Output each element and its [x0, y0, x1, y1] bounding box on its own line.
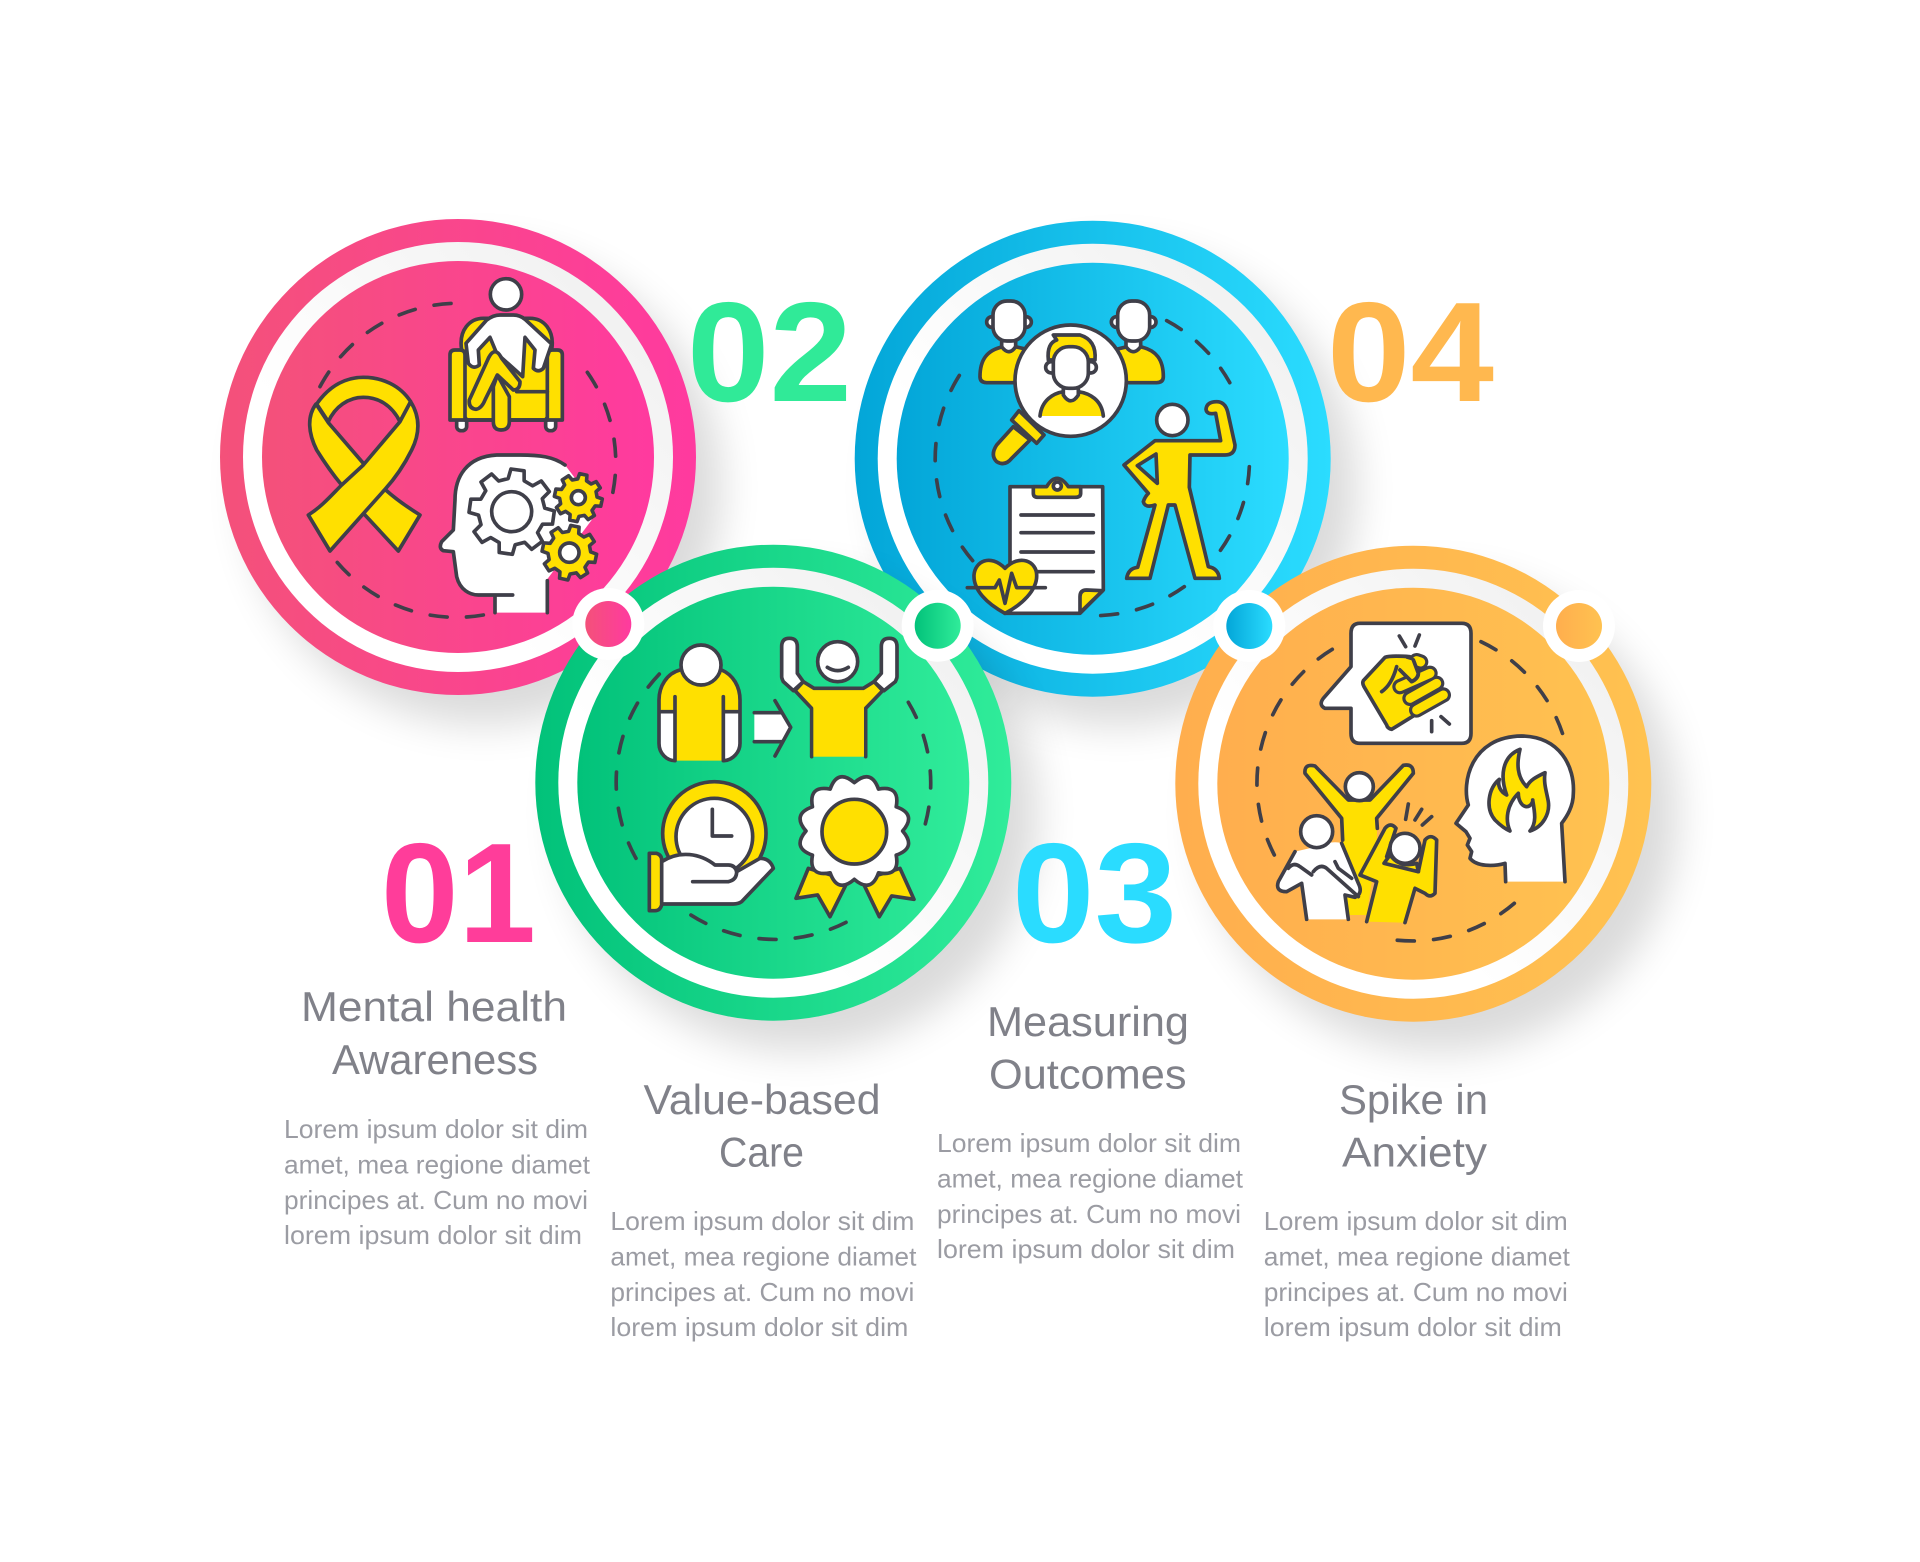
text block 1 [284, 983, 591, 1250]
dashed arcs [320, 303, 616, 617]
text block 4 [1264, 1076, 1571, 1342]
dashed arcs [616, 673, 931, 939]
body 4: principes at. Cum no movi [1264, 1277, 1568, 1307]
panel: circle 4 spike in anxiety [1175, 546, 1678, 1052]
body 2: lorem ipsum dolor sit dim [610, 1312, 908, 1342]
inner disc [577, 587, 969, 979]
drop shadow [881, 250, 1357, 726]
connector dot: orange [1543, 590, 1615, 662]
drop shadow [562, 575, 1038, 1051]
text block 3 [937, 998, 1244, 1264]
panel: circle 3 measuring outcomes [855, 221, 1357, 726]
body 4: lorem ipsum dolor sit dim [1264, 1312, 1562, 1342]
icon: speech bubble with fist [1321, 623, 1471, 743]
outer ring [220, 219, 696, 695]
icon: slumped person [659, 645, 740, 761]
icons group [308, 279, 616, 617]
icons group [616, 638, 931, 939]
heading 1: Mental health [301, 983, 567, 1030]
body 1: principes at. Cum no movi [284, 1185, 588, 1215]
icon: head with gears [440, 455, 606, 613]
icon: strong man [1124, 402, 1235, 578]
icon: awareness ribbon [308, 377, 420, 551]
icon: award rosette [796, 777, 914, 917]
number 03: 03 [1012, 814, 1177, 973]
white ring [878, 244, 1308, 674]
body 2: principes at. Cum no movi [610, 1277, 914, 1307]
heading 4: Spike in [1339, 1076, 1488, 1123]
drop shadow [1202, 576, 1678, 1052]
icon: clock in hand [649, 782, 773, 911]
body 1: lorem ipsum dolor sit dim [284, 1220, 582, 1250]
icon: person in armchair [450, 279, 562, 431]
dashed arcs [1257, 642, 1563, 941]
heading 1: Awareness [332, 1036, 538, 1083]
arrow [754, 701, 791, 756]
panel: circle 2 value-based care [535, 545, 1038, 1051]
inner disc [897, 263, 1289, 655]
connector dot: blue [1213, 590, 1285, 662]
outer ring [855, 221, 1331, 697]
body 3: lorem ipsum dolor sit dim [937, 1234, 1235, 1264]
connector dot: pink [572, 588, 644, 660]
number 04: 04 [1327, 273, 1494, 432]
heading 4: Anxiety [1342, 1128, 1487, 1176]
heading 3 [987, 998, 1189, 1098]
heading 2: Care [719, 1128, 804, 1176]
icons group [935, 301, 1249, 616]
body 2: amet, mea regione diamet [610, 1241, 917, 1271]
body 3: Lorem ipsum dolor sit dim [937, 1128, 1241, 1158]
icon: head with flame [1456, 736, 1573, 882]
heading 4 [1339, 1076, 1488, 1176]
body 4: amet, mea regione diamet [1264, 1241, 1571, 1271]
body 4: Lorem ipsum dolor sit dim [1264, 1206, 1568, 1236]
white ring [558, 568, 988, 998]
inner disc [262, 261, 654, 653]
icon: group of distressed people [1278, 765, 1437, 923]
icon: clipboard with heart [967, 478, 1103, 613]
icon: happy person [782, 638, 897, 757]
body 1 [284, 1114, 591, 1250]
heading 2: Value-based [644, 1076, 880, 1123]
panel: circle 1 mental health awareness [220, 219, 722, 725]
icon: people under magnifier [980, 301, 1163, 464]
body 3: amet, mea regione diamet [937, 1164, 1244, 1194]
number 02: 02 [687, 273, 852, 432]
body 2 [610, 1206, 917, 1342]
icons group [1257, 623, 1573, 941]
body 2: Lorem ipsum dolor sit dim [610, 1206, 914, 1236]
body 4 [1264, 1206, 1571, 1342]
heading 3: Measuring [987, 998, 1189, 1045]
white ring [243, 242, 673, 672]
dashed arcs [935, 321, 1249, 616]
text block 2 [610, 1076, 917, 1342]
body 3: principes at. Cum no movi [937, 1199, 1241, 1229]
heading 2 [644, 1076, 880, 1176]
body 1: amet, mea regione diamet [284, 1149, 591, 1179]
body 3 [937, 1128, 1244, 1264]
outer ring [535, 545, 1011, 1021]
connector dot: green [902, 590, 974, 662]
heading 3: Outcomes [989, 1050, 1186, 1098]
white ring [1198, 569, 1628, 999]
outer ring [1175, 546, 1651, 1022]
body 1: Lorem ipsum dolor sit dim [284, 1114, 588, 1144]
heading 1 [301, 983, 567, 1083]
number 01: 01 [381, 814, 536, 973]
drop shadow [246, 249, 722, 725]
inner disc [1217, 588, 1609, 980]
